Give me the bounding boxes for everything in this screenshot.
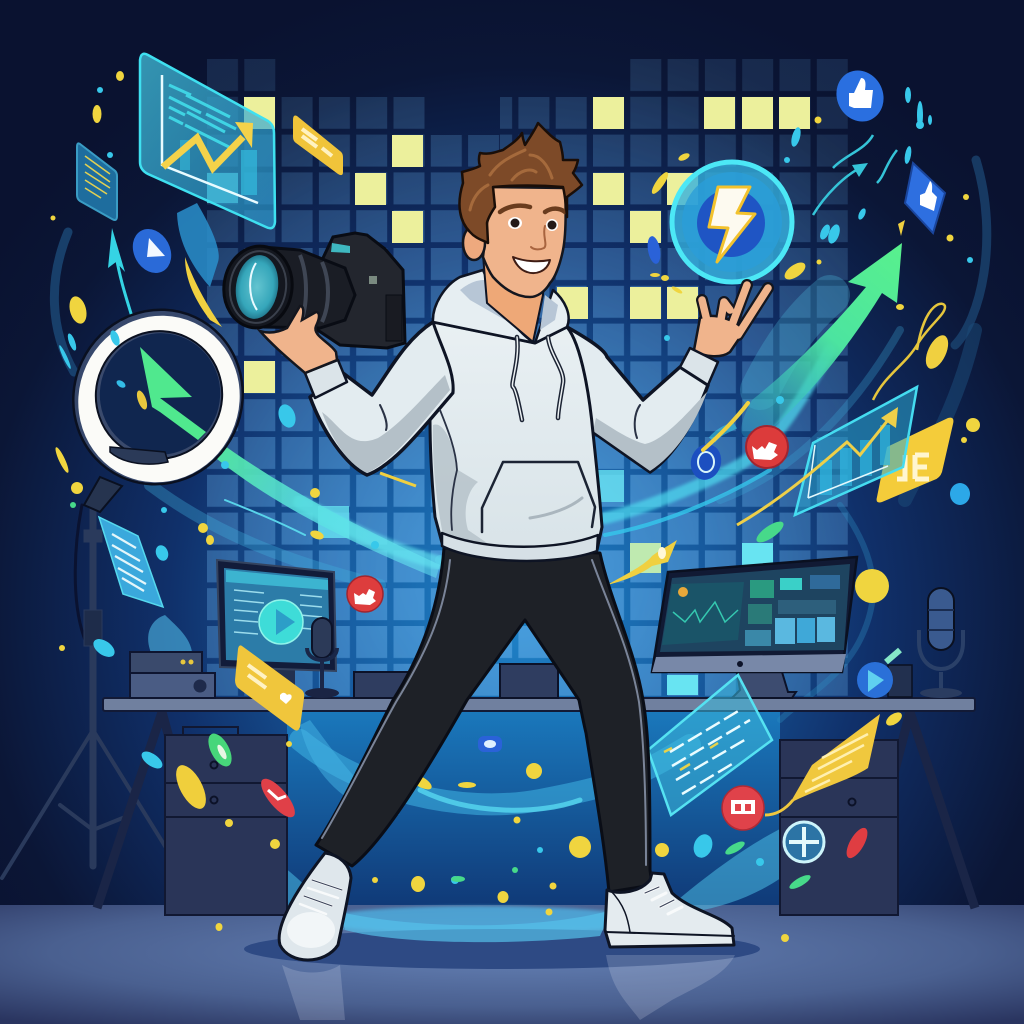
arrow: small cyan up arrow left <box>108 228 133 320</box>
arrow: small cyan arrows top right <box>813 135 897 215</box>
icon: blue ring badge <box>687 425 735 483</box>
desk gear <box>354 664 558 698</box>
panel: lower right code card <box>648 675 772 815</box>
character <box>279 123 768 960</box>
hem <box>442 533 598 561</box>
pocket <box>482 462 595 532</box>
lens glass <box>219 242 297 332</box>
pixel grid wall <box>207 59 848 700</box>
left shoe <box>279 853 351 960</box>
icon: yellow note card <box>293 116 343 175</box>
left document card <box>99 517 163 607</box>
panel: small left data card <box>77 143 117 220</box>
light control head <box>110 447 168 464</box>
desk <box>97 698 975 908</box>
energy swirl streams <box>150 295 900 810</box>
nose and mouth <box>531 226 545 249</box>
lens barrel <box>262 247 355 328</box>
pants stripes <box>322 560 646 865</box>
panel: top left chart <box>140 54 275 228</box>
bottom translucent fans <box>178 720 830 942</box>
icon: red heart badge <box>746 426 788 468</box>
left computer tower <box>165 727 287 915</box>
arrow: green arrow through ring <box>140 347 206 440</box>
ring light with tripod <box>2 282 271 880</box>
hair <box>459 123 582 243</box>
yellow squiggle right <box>873 304 953 400</box>
camera held in hand <box>219 233 405 373</box>
tripod <box>2 500 186 880</box>
arrow tail green to cyan <box>192 428 440 578</box>
shoe reflections <box>282 955 735 1020</box>
hoodie left arm <box>310 322 460 475</box>
hoodie torso <box>430 322 602 560</box>
icon: lightning bolt <box>709 187 755 262</box>
icon: blue plus badge <box>784 822 824 862</box>
floor glow and shadow <box>244 906 760 969</box>
chart axes <box>162 75 258 203</box>
energy orb with lightning <box>672 162 792 282</box>
desk speaker and play cube <box>857 650 912 698</box>
right monitor <box>652 557 857 698</box>
icon: thumbs up badge top right <box>828 63 892 129</box>
panel: right floating chart <box>737 387 917 525</box>
left monitor <box>217 560 336 698</box>
right hand <box>694 285 768 356</box>
arrow: large green rising arrow right <box>741 243 902 438</box>
icon: red heart badge left <box>347 576 383 612</box>
drawstrings <box>512 337 563 420</box>
pants <box>316 548 652 892</box>
small desk microphone <box>305 618 339 698</box>
under desk glow wall <box>287 711 780 905</box>
icon: play button <box>259 600 303 644</box>
right cuff <box>680 348 718 385</box>
right shoe <box>605 873 734 947</box>
icon: thumbs up cube <box>898 163 945 236</box>
yellow card right <box>877 418 953 502</box>
ring clamp <box>84 477 122 512</box>
left cuff <box>305 360 347 398</box>
floor <box>0 905 1024 1024</box>
yellow message card right <box>765 714 880 815</box>
blue and yellow ribbons behind camera <box>177 203 222 327</box>
yellow flame streak <box>380 403 748 585</box>
right computer tower <box>780 740 898 915</box>
face <box>483 187 566 297</box>
icon: rising arrow <box>163 137 243 168</box>
eyes <box>508 217 522 229</box>
camera body <box>313 233 405 348</box>
left desk equipment <box>130 615 215 698</box>
eyebrows <box>500 206 565 212</box>
studio microphone right <box>919 588 963 698</box>
hood collar back <box>433 270 569 343</box>
left hand <box>260 306 337 373</box>
ear <box>463 226 485 260</box>
bright cyan cells <box>318 470 773 695</box>
icon: red gallery badge <box>722 786 764 830</box>
left leaf badges <box>170 730 300 822</box>
icon: yellow trend line <box>737 415 892 525</box>
yellow comment card left <box>235 645 304 731</box>
neck <box>483 255 545 342</box>
icon: play badge left <box>125 222 179 280</box>
dark outer arcs <box>54 160 987 500</box>
hoodie right arm <box>567 327 708 472</box>
highlighted yellow cells <box>244 97 810 573</box>
confetti dots <box>50 71 980 942</box>
